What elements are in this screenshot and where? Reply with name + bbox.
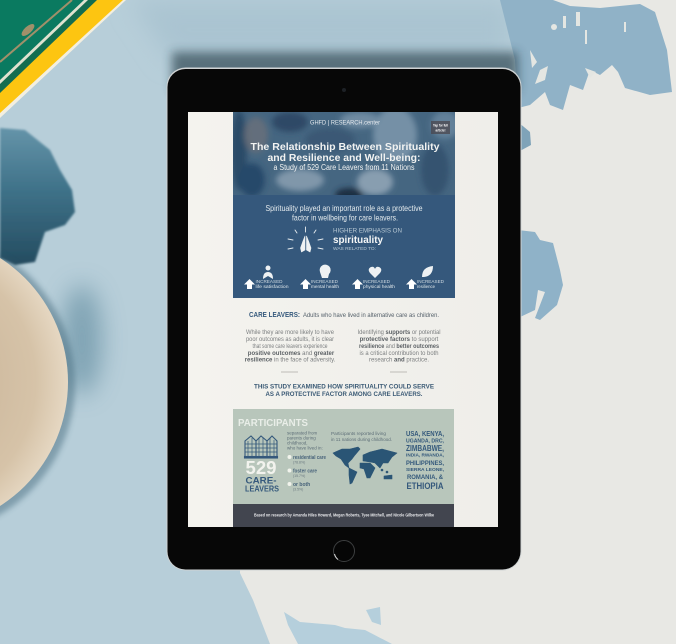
emphasis statement: HIGHER EMPHASIS ON [333,228,402,234]
outcome: mental health: INCREASED [311,279,339,284]
care leavers definition [249,310,439,319]
separated text: parents during [287,436,316,440]
icon: praying hands [288,227,323,252]
outcome: resilience: resilience [417,284,436,289]
heading: PARTICIPANTS [238,417,308,429]
paint patch: bottom [284,612,392,644]
paint patch: right middle [518,122,531,152]
text block: left paragraph: poor outcomes as adults, it is clear [246,337,334,343]
title: The Relationship Between Spirituality [250,141,440,153]
text block: right paragraph: is a critical contribution to both [360,351,438,357]
text block: right paragraph: protective factors to support [360,337,439,343]
outcome: mental health [300,265,340,289]
country list: ZIMBABWE, [406,444,444,453]
country list: SIERRA LEONE, [406,467,445,473]
emphasis statement: spirituality [333,234,383,246]
separated text: childhood, [287,440,308,446]
separated text [287,430,323,450]
title [250,141,440,172]
camera [342,88,346,92]
outcome: physical health [352,267,396,289]
care type list: residential care [293,455,326,461]
care type list [288,455,326,492]
paint patch: top right [500,0,672,110]
text block: left paragraph [245,330,336,364]
emphasis statement [333,228,402,252]
care leavers definition: Adults who have lived in alternative care as children. [303,312,439,319]
text block: right paragraph: research and practice. [369,358,429,364]
plate [0,233,75,535]
big number: 529 [246,458,276,478]
map caption [331,431,392,443]
paint patch: bottom small [366,607,381,625]
care-leavers label: CARE- [246,476,276,486]
outcome: life satisfaction [244,266,289,289]
tap button: article! [436,128,446,132]
text block: left paragraph: that some care leavers experience [252,344,328,350]
panel: participants [233,409,454,505]
map caption: in 11 nations during childhood. [331,437,392,443]
outcome: life satisfaction: INCREASED [256,279,283,284]
header with photo background [233,112,455,195]
home button [334,540,354,562]
book: green cover with yellow band [0,0,126,118]
finding statement [266,203,423,222]
outcome: life satisfaction: life satisfaction [256,284,289,289]
tap button: Tap for full [433,124,448,128]
paint patch: right lower [518,230,563,320]
map caption: Participants reported living [331,431,386,437]
finding statement: factor in wellbeing for care leavers. [292,212,398,222]
care type list: foster care [293,468,317,474]
country list: ROMANIA, & [407,474,443,481]
care-leavers label: LEAVERS [245,484,279,494]
icon: children figures [244,436,278,458]
title: a Study of 529 Care Leavers from 11 Nations [274,163,415,172]
care leavers definition: CARE LEAVERS: [249,310,300,319]
tablet device [166,68,522,570]
country list: USA, KENYA, [406,429,444,438]
country list: INDIA, RWANDA, [406,452,444,458]
separated text: separated from [287,430,318,436]
care type list: (78.8%) [293,460,305,464]
emphasis statement: WAS RELATED TO: [333,246,376,252]
care type list: (15.7%) [293,474,305,478]
study statement: THIS STUDY EXAMINED HOW SPIRITUALITY COULD SERVE [254,384,434,390]
outcome: resilience: INCREASED [417,279,445,284]
dividers [281,372,407,373]
country list [406,429,445,491]
finding statement: Spirituality played an important role as a protective [266,203,423,213]
infographic content [231,107,459,527]
tablet shadow [172,52,518,92]
text block: left paragraph: While they are more likely to have [246,330,335,336]
text block: left paragraph: resilience in the face of adversity. [245,358,336,364]
outcome: mental health: mental health [311,284,340,289]
footer credit: Based on research by Amanda Hiles Howard, Megan Roberts, Tyee Mitchell, and Nicole Gilbertson Wilke [254,512,434,518]
text block: right paragraph: Identifying supports or potential [358,330,440,336]
dark teal stain: left [0,128,75,265]
outcome: physical health: INCREASED [363,279,391,284]
country list: UGANDA, DRC, [406,438,445,444]
text block: right paragraph: resilience and better outcomes [359,344,440,350]
logo: GHFD | RESEARCH.center [310,120,381,126]
tablet screen [188,112,498,527]
study statement: AS A PROTECTIVE FACTOR AMONG CARE LEAVERS. [266,391,423,398]
tap button [431,121,450,134]
world map [333,447,397,484]
blurred crowd photo [233,112,455,195]
care-leavers label [245,476,279,494]
country list: ETHIOPIA [406,481,444,491]
title: and Resilience and Well-being: [268,152,420,164]
outcome: physical health: physical health [363,284,396,289]
panel: key finding [233,195,455,298]
outcome: resilience [406,266,445,289]
footer credit [233,504,454,527]
care type list: (3.5%) [293,488,303,492]
care type list: or both [293,482,310,488]
country list: PHILIPPINES, [406,460,444,467]
text block: right paragraph [358,330,440,364]
text block: left paragraph: positive outcomes and greater [248,351,335,357]
separated text: who have lived in: [287,446,323,450]
study statement [254,384,434,398]
